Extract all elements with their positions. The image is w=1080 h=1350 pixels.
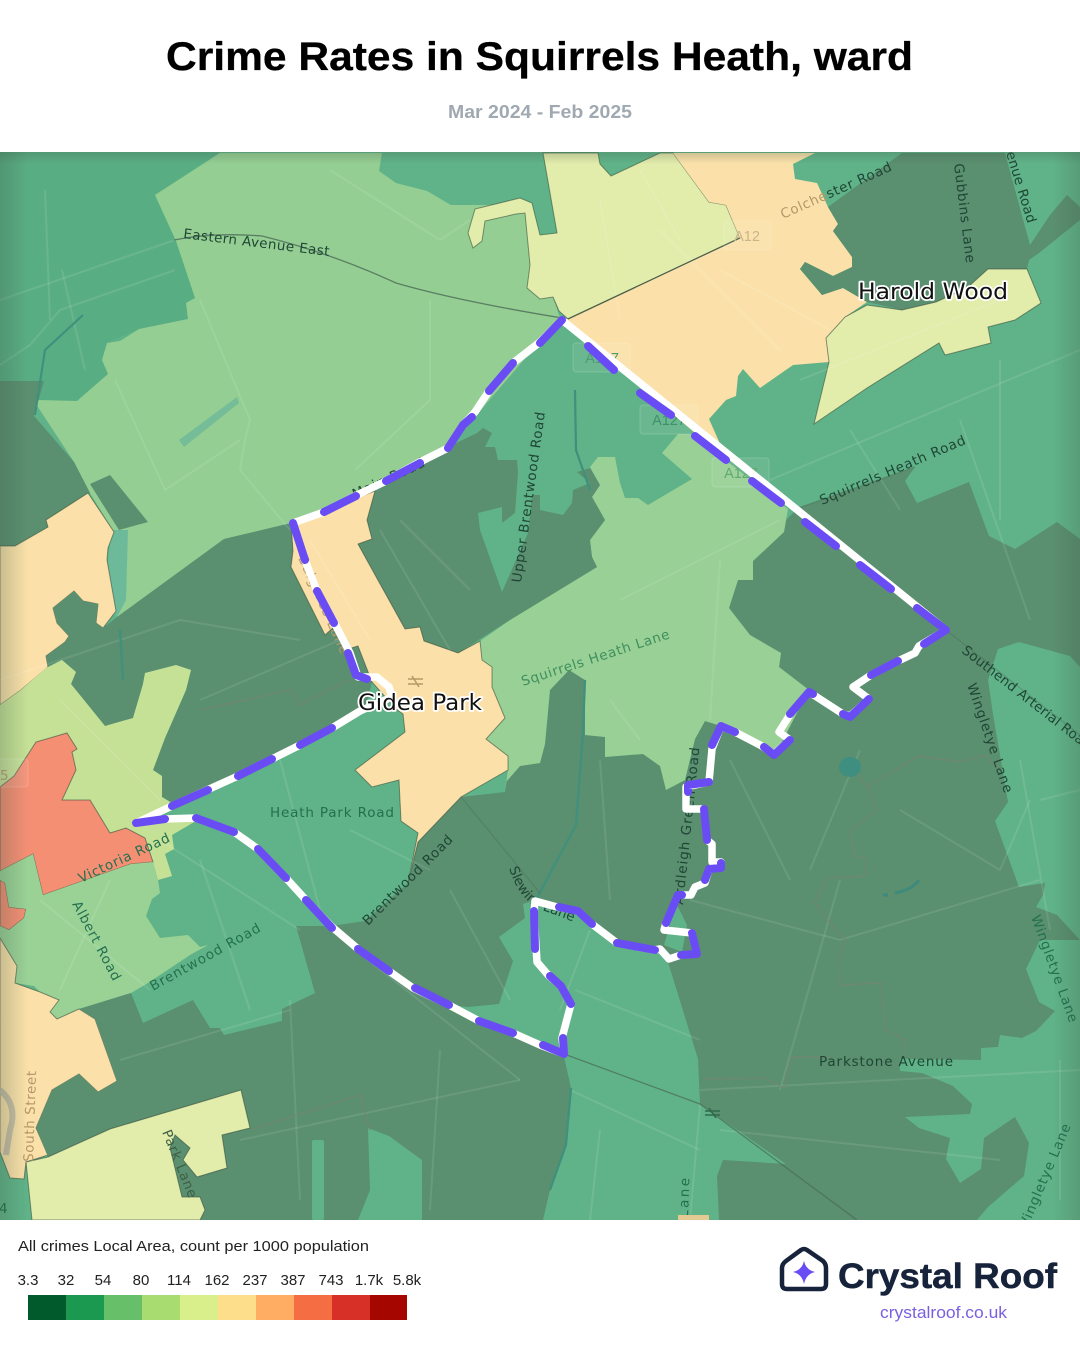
station icon: Gidea Park	[408, 676, 423, 687]
legend values: 80	[133, 1272, 149, 1289]
map edge shading	[0, 152, 1080, 1220]
region: highest crime red-orange	[0, 733, 153, 895]
road label: Slewins Lane: Slewins Lane	[510, 866, 574, 921]
road label: Wingletye Lane middle: Wingletye Lane	[1027, 913, 1080, 1025]
region: north-east cream	[562, 153, 867, 450]
road label: Albert Road: Albert Road	[68, 898, 124, 984]
region: west dark	[46, 523, 372, 803]
legend values: 54	[95, 1272, 111, 1289]
boundary white base line	[136, 320, 946, 1054]
region: bottom pale yellow	[26, 1090, 250, 1220]
icon: house with sparkle	[782, 1249, 826, 1289]
road label: Brentwood Road east: Brentwood Road	[360, 832, 456, 929]
region: dark area far west	[0, 381, 90, 546]
region: large park light green	[34, 153, 560, 617]
road label: Park Lane: Park Lane	[158, 1128, 200, 1200]
road and rail lines	[174, 235, 1080, 1220]
pond	[839, 757, 861, 777]
road label: Brentwood Road west: Brentwood Road	[147, 920, 263, 994]
river on south-west cream	[0, 1090, 12, 1155]
region: small dark wedge	[90, 475, 148, 530]
region: pitch	[179, 397, 239, 447]
road label: Parkstone Avenue: Parkstone Avenue	[819, 1054, 953, 1070]
legend colour scale	[28, 1295, 407, 1320]
region: bottom green patch	[358, 1128, 422, 1220]
road shield: A127 middle: A127	[652, 413, 686, 429]
small stream segment	[883, 880, 919, 895]
region: central light green	[480, 434, 809, 792]
road label: Avenue Road fragment: enue Road	[1002, 149, 1039, 225]
place label: Harold Wood: Harold Wood	[858, 279, 1008, 305]
website link text: crystalroof.co.uk	[880, 1304, 1008, 1322]
road label: Wingletye Lane north: Wingletye Lane	[963, 681, 1016, 795]
road label: Heath Park Road: Heath Park Road	[270, 805, 394, 821]
road shield: A12	[724, 221, 771, 250]
region: pale teal strip	[108, 530, 128, 617]
road label: Victoria Road: Victoria Road	[76, 830, 172, 887]
road label: Upper Brentwood Road: Upper Brentwood Road	[509, 411, 549, 584]
stream	[35, 315, 590, 1190]
title: Crime Rates in Squirrels Heath, ward	[166, 35, 913, 79]
region: north-east dark	[800, 153, 1080, 310]
road shield: A127 north	[573, 343, 630, 372]
road label: Colchester Road: Colchester Road	[778, 159, 894, 223]
ward boundary: Squirrels Heath	[136, 320, 946, 1054]
road shield: A12: A12	[734, 229, 760, 245]
legend values: 5.8k	[393, 1272, 422, 1289]
cream label fragment at south edge	[678, 1215, 709, 1223]
region: west cream	[0, 493, 116, 705]
road label: South Street: South Street	[21, 1071, 40, 1162]
legend values: 114	[167, 1272, 191, 1289]
road label: Ardleigh Green Road: Ardleigh Green Road	[671, 747, 703, 905]
logo: Crystal Roof	[782, 1249, 1057, 1322]
map base: mid green areas	[0, 152, 1080, 1220]
legend values: 387	[280, 1272, 306, 1289]
region: west lime green	[0, 660, 196, 880]
station icon: Emerson Park	[705, 1108, 720, 1118]
legend values: 1.7k	[355, 1272, 384, 1289]
park boundary paths	[200, 680, 1000, 1130]
region: Harold Wood pale yellow	[814, 269, 1041, 424]
road label: Eastern Avenue East: Eastern Avenue East	[183, 226, 330, 260]
road network	[0, 170, 1080, 1220]
boundary purple dashes	[136, 320, 946, 1054]
road label: Squirrels Heath Road: Squirrels Heath Road	[817, 433, 968, 509]
region: green sliver in boundary loop	[664, 903, 687, 952]
region: north-west slightly darker green	[0, 152, 220, 401]
region: south-west cream	[0, 938, 117, 1179]
place label: Gidea Park: Gidea Park	[358, 690, 482, 716]
road shield: west edge	[0, 759, 28, 787]
road label: Wingletye Lane south: Wingletye Lane	[1015, 1121, 1075, 1234]
region: bottom green strip	[312, 1140, 324, 1220]
road label: Main Road: Main Road	[350, 455, 427, 503]
region: Gidea Park cream	[291, 491, 508, 883]
road label: Gubbins Lane: Gubbins Lane	[950, 163, 978, 264]
region: central and south-east dark	[331, 467, 1080, 1220]
legend	[18, 1238, 422, 1320]
legend values: 162	[204, 1272, 230, 1289]
region: north centre pale yellow	[468, 153, 740, 319]
region: Upper Brentwood dark	[358, 428, 605, 653]
legend values: 3.3	[18, 1272, 38, 1289]
legend values: 237	[242, 1272, 268, 1289]
road label: Balgores Lane: Balgores Lane	[294, 553, 352, 656]
road label: Lane: Lane	[676, 1178, 693, 1218]
road label fragment at west edge: 5	[0, 768, 9, 784]
road shield: A127 south: A127	[724, 466, 758, 482]
legend title: All crimes Local Area, count per 1000 population	[18, 1238, 369, 1255]
road shield: A127 middle	[640, 405, 698, 434]
legend values: 743	[318, 1272, 344, 1289]
logo wordmark: Crystal Roof	[838, 1257, 1057, 1296]
region: south dark	[36, 926, 571, 1220]
legend values: 32	[58, 1272, 74, 1289]
region: south-west light green	[0, 854, 208, 1019]
legend values	[18, 1272, 422, 1289]
subtitle: date range: Mar 2024 - Feb 2025	[448, 102, 632, 122]
road label: Squirrels Heath Lane: Squirrels Heath Lane	[519, 627, 672, 690]
road shield: A127 south	[712, 458, 769, 487]
road shield: A127 north: A127	[585, 351, 619, 367]
region: small red-orange west edge	[0, 880, 26, 930]
